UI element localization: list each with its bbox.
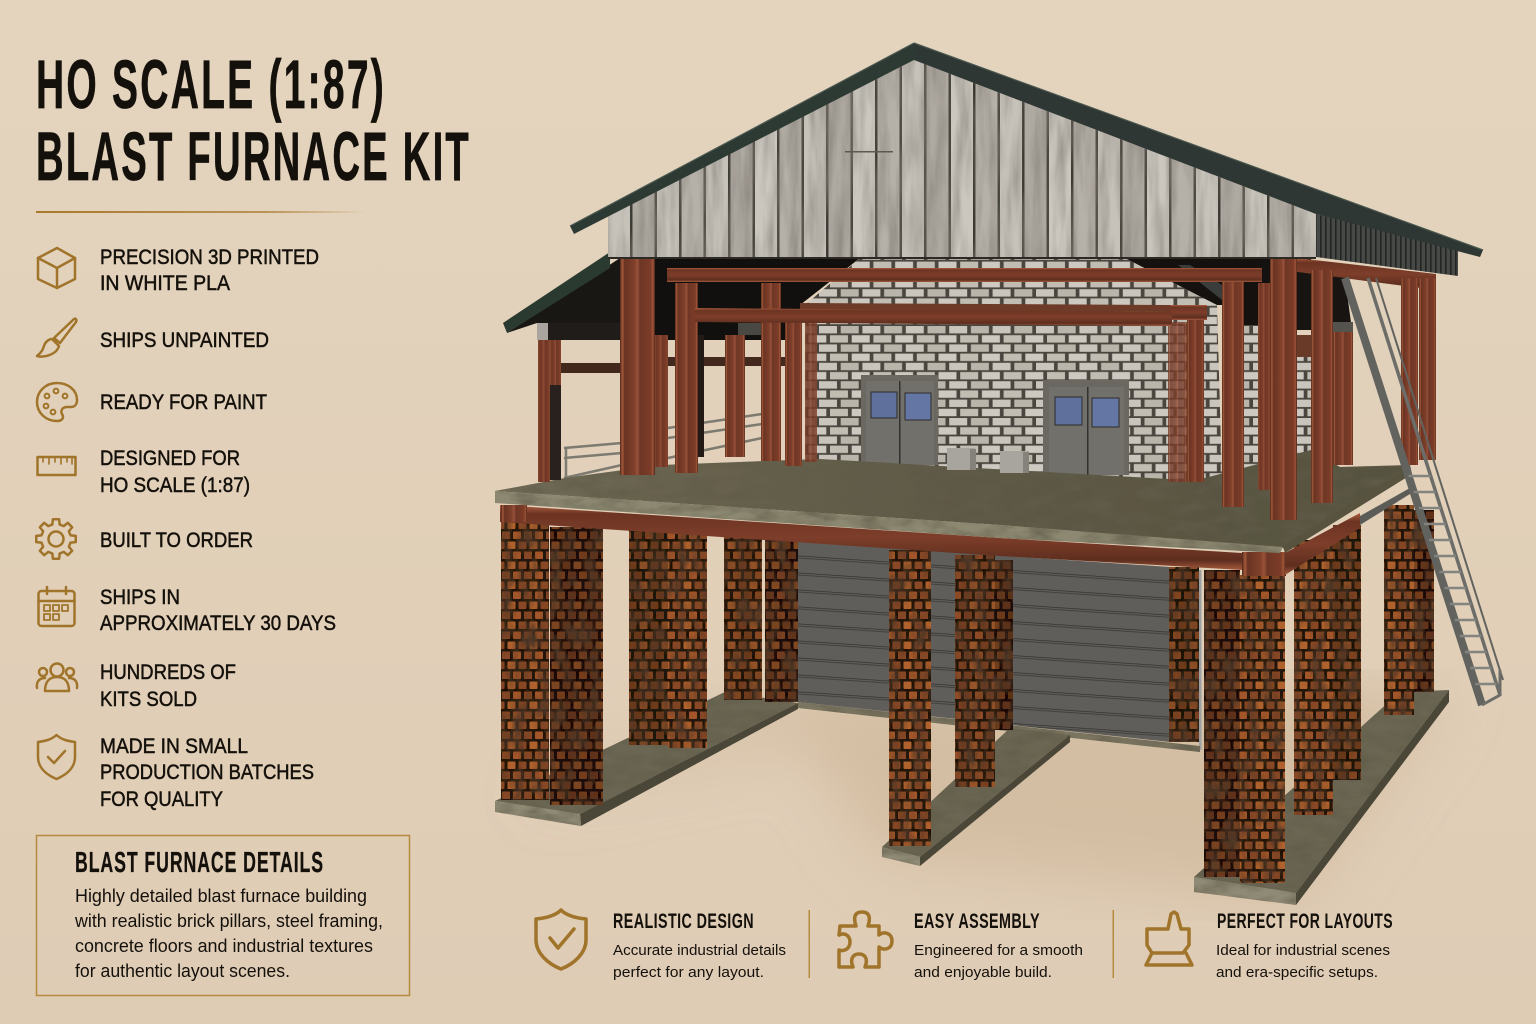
details heading: BLAST FURNACE DETAILS <box>75 847 324 879</box>
details text: Highly detailed blast furnace building <box>75 886 367 906</box>
title: HO SCALE (1:87) <box>36 46 386 123</box>
icon: calendar <box>38 587 74 626</box>
gable wall boards <box>608 60 1316 259</box>
icon: palette <box>37 383 77 421</box>
details text <box>74 886 383 981</box>
feature: precision 3D printed: IN WHITE PLA <box>100 272 230 295</box>
ground shadow <box>520 690 1450 900</box>
concrete floor <box>495 450 1410 548</box>
feature: small production batches: MADE IN SMALL <box>100 735 248 758</box>
door: right double door <box>1043 380 1129 475</box>
feature: built to order: BUILT TO ORDER <box>100 529 253 552</box>
icon: paint brush <box>37 319 76 357</box>
white brick wall <box>805 258 1222 480</box>
feature list <box>36 246 336 811</box>
right side corrugated wall <box>1316 214 1458 276</box>
icon: shield check <box>38 735 75 779</box>
feature: ready for paint: READY FOR PAINT <box>100 391 267 414</box>
icon: gear <box>36 519 76 559</box>
icon: ruler <box>38 457 76 475</box>
footing: left <box>495 692 798 826</box>
feature: precision 3D printed <box>100 246 319 295</box>
easy assembly text: EASY ASSEMBLY <box>914 910 1040 933</box>
easy assembly text: and enjoyable build. <box>914 964 1052 981</box>
icon: shield <box>536 910 586 969</box>
door: left double door <box>861 375 938 465</box>
upper level rear structure <box>507 258 860 478</box>
building model <box>495 43 1503 905</box>
feature: small production batches: FOR QUALITY <box>100 788 223 811</box>
details text: for authentic layout scenes. <box>75 961 290 981</box>
details text: with realistic brick pillars, steel framing, <box>74 911 383 931</box>
feature: designed for HO scale: DESIGNED FOR <box>100 447 240 470</box>
perfect for layouts text: Ideal for industrial scenes <box>1216 942 1390 959</box>
left annex roof <box>503 252 610 333</box>
brick pillars <box>501 505 1434 883</box>
title: BLAST FURNACE KIT <box>36 118 471 195</box>
realistic design text <box>613 910 786 981</box>
perfect for layouts text: and era-specific setups. <box>1216 964 1378 981</box>
steel staircase <box>1345 278 1503 705</box>
footing: center <box>882 728 1070 866</box>
feature: precision 3D printed: PRECISION 3D PRINTED <box>100 246 319 269</box>
benefit: realistic design <box>536 910 786 981</box>
icon: furnace <box>1146 912 1192 965</box>
concrete floor edge <box>495 465 1412 553</box>
perfect for layouts text: PERFECT FOR LAYOUTS <box>1217 910 1393 933</box>
concrete blocks <box>947 448 1029 473</box>
footing: right <box>1194 690 1449 905</box>
feature: designed for HO scale <box>100 447 250 497</box>
feature: hundreds of kits sold <box>100 661 236 711</box>
easy assembly text: Engineered for a smooth <box>914 942 1083 959</box>
realistic design text: REALISTIC DESIGN <box>613 910 754 933</box>
easy assembly text <box>914 910 1083 981</box>
feature: ships in 30 days: APPROXIMATELY 30 DAYS <box>100 612 336 635</box>
perfect for layouts text <box>1216 910 1393 981</box>
under-floor steel beam <box>500 488 1410 576</box>
feature: ships in 30 days <box>100 586 336 635</box>
realistic design text: perfect for any layout. <box>613 964 764 981</box>
feature: small production batches: PRODUCTION BATCHES <box>100 761 314 784</box>
steel cross beams <box>667 268 1262 326</box>
panel: blast furnace details <box>36 836 410 996</box>
roof <box>570 43 1483 257</box>
icon: puzzle piece <box>839 912 892 967</box>
icon: cube <box>38 248 75 288</box>
benefit: perfect for layouts <box>1146 910 1393 981</box>
feature: hundreds of kits sold: KITS SOLD <box>100 688 197 711</box>
steel columns <box>538 258 1436 520</box>
right interior <box>1125 258 1436 475</box>
icon: people <box>37 664 77 691</box>
title <box>36 46 471 195</box>
feature: designed for HO scale: HO SCALE (1:87) <box>100 474 250 497</box>
feature: ships in 30 days: SHIPS IN <box>100 586 180 609</box>
benefit: easy assembly <box>839 910 1083 981</box>
feature: ships unpainted: SHIPS UNPAINTED <box>100 329 269 352</box>
feature: small production batches <box>100 735 314 811</box>
feature: hundreds of kits sold: HUNDREDS OF <box>100 661 236 684</box>
details text: concrete floors and industrial textures <box>75 936 373 956</box>
realistic design text: Accurate industrial details <box>613 942 786 959</box>
roller doors <box>798 542 1202 752</box>
